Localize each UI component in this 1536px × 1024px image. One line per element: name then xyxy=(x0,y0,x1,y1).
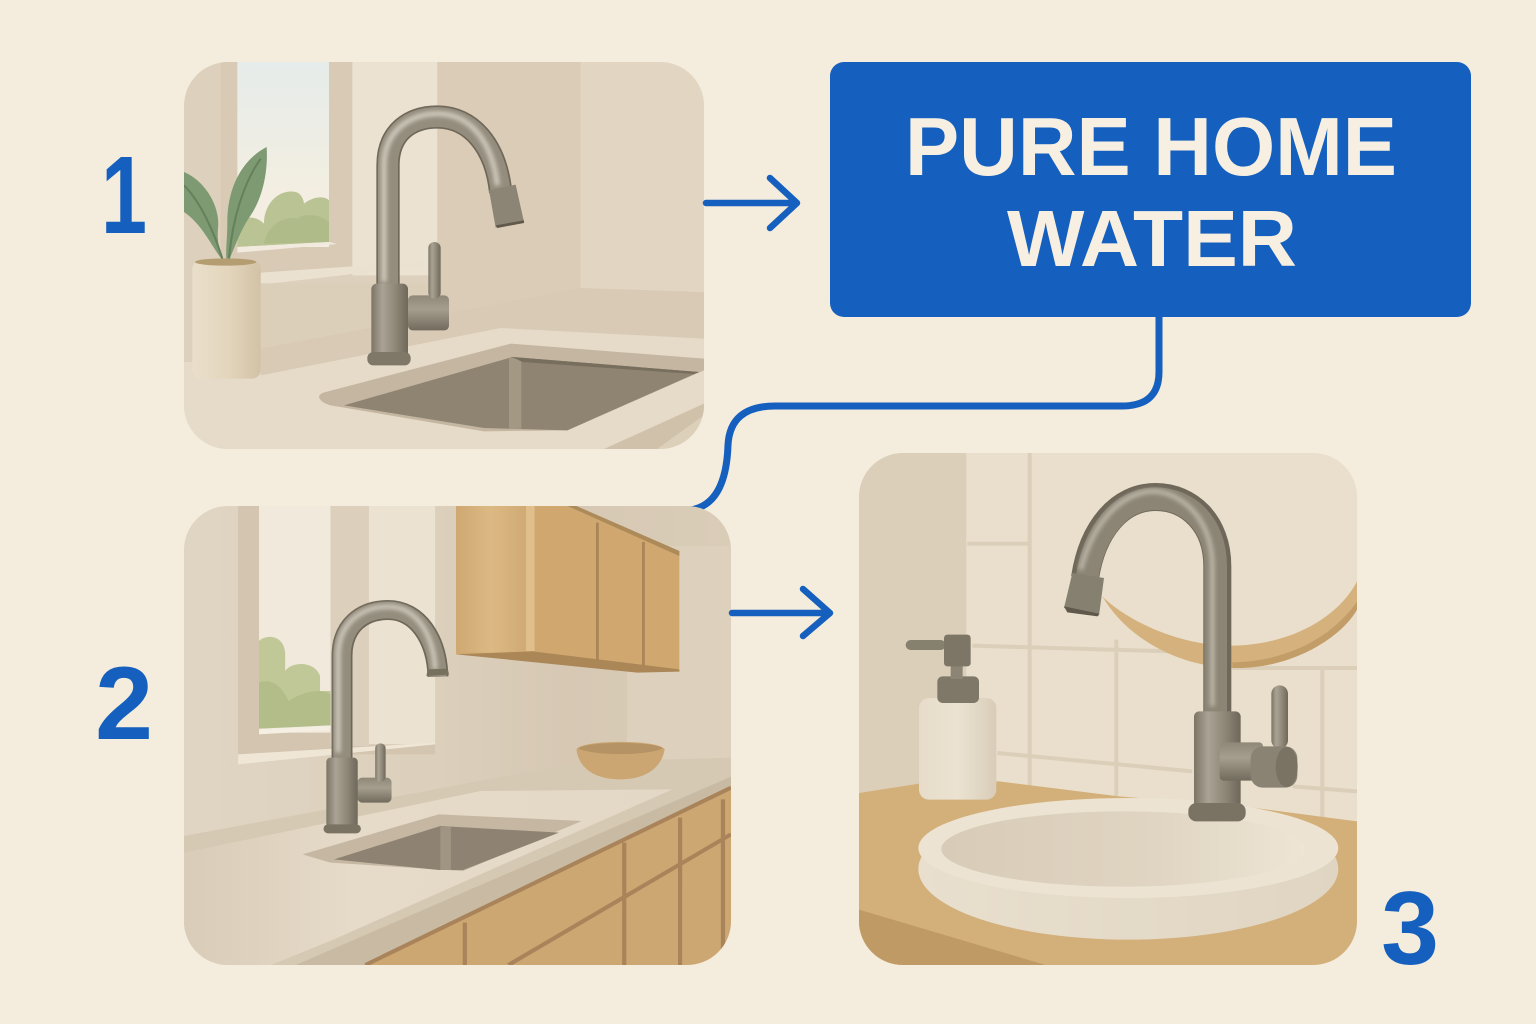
arrow: step 2 to step 3 xyxy=(732,589,830,636)
window xyxy=(238,506,435,764)
title box: PURE HOME xyxy=(905,100,1397,193)
panel 3: bathroom sink xyxy=(859,453,1357,965)
sink xyxy=(319,344,704,431)
panel 2: kitchen with cabinets xyxy=(184,506,731,965)
step number 2: 2 xyxy=(95,646,153,762)
arrow: step 1 to title xyxy=(706,178,797,228)
faucet xyxy=(1064,491,1298,821)
lower cabinets xyxy=(365,788,731,965)
step number 3: 3 xyxy=(1381,871,1439,987)
counter xyxy=(184,758,731,965)
tiles grout xyxy=(967,453,1357,820)
faucet xyxy=(324,607,449,833)
upper cabinets xyxy=(456,506,679,673)
bowl xyxy=(576,742,665,779)
title box xyxy=(830,62,1471,317)
wooden counter xyxy=(859,781,1357,965)
title box: WATER xyxy=(1007,194,1297,283)
sink xyxy=(303,814,582,871)
basin xyxy=(918,798,1338,940)
soap dispenser xyxy=(906,635,996,800)
step number 1: 1 xyxy=(101,134,147,257)
connector from title to panel 2 xyxy=(690,317,1159,510)
plant in pot xyxy=(184,147,267,379)
window sill xyxy=(260,266,352,284)
faucet xyxy=(367,114,524,365)
round mirror with wood frame xyxy=(1102,581,1357,668)
window xyxy=(221,62,352,275)
counter xyxy=(184,328,704,449)
panel 1: kitchen faucet by window xyxy=(184,62,704,449)
